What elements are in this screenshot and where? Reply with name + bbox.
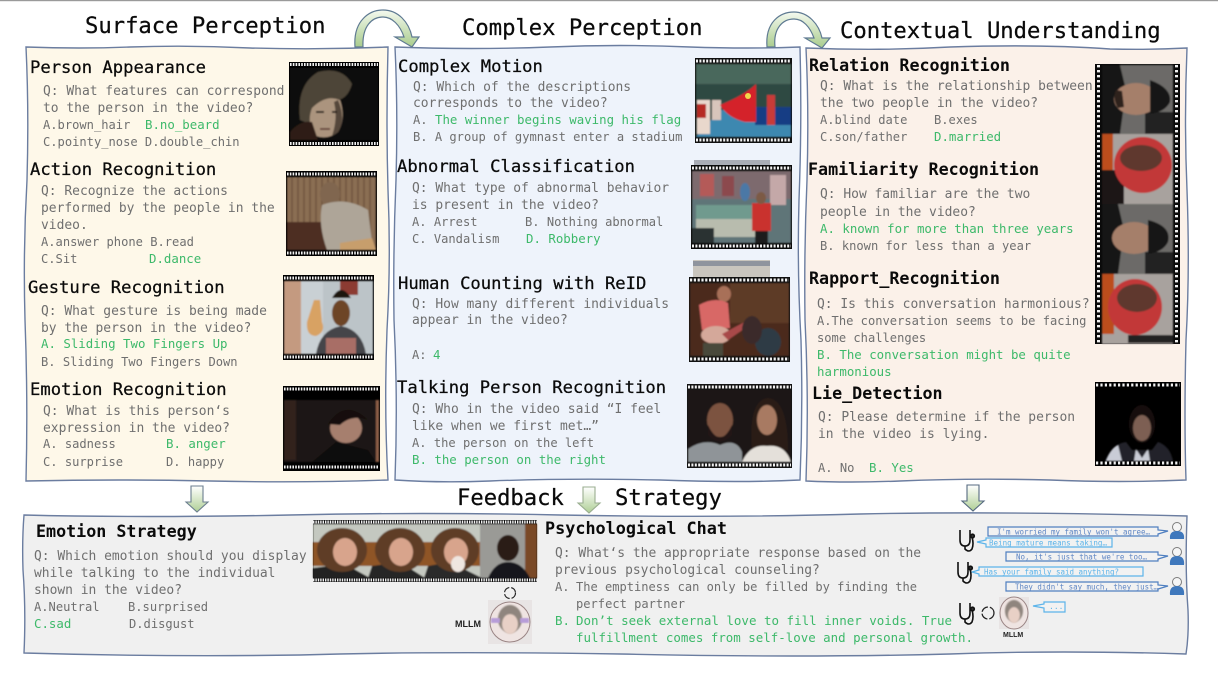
block: emotion strategy: Emotion Strategy — [36, 521, 197, 541]
image: gesture recognition film frame — [283, 275, 374, 360]
image: abnormal classification film frame — [691, 160, 792, 249]
image: human counting film frame — [689, 260, 790, 362]
image: lie detection film frame — [1095, 382, 1181, 466]
image: talking person film frame — [687, 384, 792, 468]
block: familiarity recognition: Familiarity Recognition — [808, 159, 1039, 179]
block: lie detection: B. Yes — [869, 460, 914, 475]
block: familiarity recognition: A. known for more than three years — [820, 221, 1074, 236]
block: human counting with reid: A: — [412, 348, 427, 362]
block: abnormal classification: C. Vandalism — [412, 232, 499, 246]
block: gesture recognition: Gesture Recognition — [28, 278, 225, 298]
arrow: down left — [186, 486, 208, 512]
block: emotion recognition: Q: What is this person‘s — [43, 404, 230, 419]
bubble: model reply: ... — [1049, 602, 1063, 611]
block: psychological chat: previous psychological counseling? — [555, 563, 820, 578]
block: action recognition: performed by the people in the — [41, 201, 275, 216]
block: lie detection: Q: Please determine if the person — [818, 410, 1075, 425]
block: action recognition: D.dance — [149, 251, 201, 266]
block: rapport recognition: Rapport_Recognition — [809, 268, 1000, 288]
panel: contextual understanding background — [805, 46, 1188, 482]
block: abnormal classification: D. Robbery — [526, 231, 601, 246]
block: emotion strategy: D.disgust — [129, 617, 195, 631]
block: relation recognition: the two people in the video? — [820, 96, 1038, 111]
block: relation recognition: A.blind date — [820, 113, 907, 127]
bubble: client line 3: They didn't say much, they just… — [1015, 582, 1158, 592]
block: complex motion: B. A group of gymnast enter a stadium — [413, 130, 682, 144]
block: relation recognition: D.married — [934, 129, 1001, 144]
block: emotion strategy: shown in the video? — [34, 583, 182, 598]
block: complex motion: Q: Which of the descriptions — [413, 80, 631, 95]
block: talking person recognition: B. the person on the right — [412, 452, 606, 467]
icon: stethoscope 1 — [960, 530, 974, 551]
block: emotion recognition: D. happy — [166, 455, 224, 469]
block: human counting with reid: 4 — [433, 347, 440, 362]
block: familiarity recognition: B. known for less than a year — [820, 239, 1031, 253]
block: person appearance: Person Appearance — [30, 58, 206, 78]
block: relation recognition: B.exes — [934, 113, 978, 127]
block: rapport recognition: B. The conversation might be quite — [817, 347, 1071, 362]
block: emotion strategy: B.surprised — [128, 600, 208, 614]
block: complex motion: The winner begins waving his flag — [435, 112, 681, 127]
chat: counseling conversation — [958, 522, 1184, 639]
image: emotion strategy film frame — [313, 520, 537, 582]
block: psychological chat: The emptiness can only be filled by finding the — [576, 580, 917, 594]
top edge line — [0, 0, 1218, 1]
block: emotion strategy: C.sad — [34, 616, 71, 631]
block: familiarity recognition: people in the video? — [820, 205, 976, 220]
image: emotion recognition film frame — [283, 386, 380, 471]
block: lie detection — [812, 383, 1075, 475]
block: action recognition — [30, 160, 275, 266]
icon: client 3 — [1170, 578, 1184, 595]
icon: loop left — [504, 588, 516, 598]
block: lie detection: in the video is lying. — [818, 427, 989, 442]
block: person appearance: C.pointy_nose D.double_chin — [43, 135, 240, 149]
image: action recognition film frame — [286, 171, 377, 256]
block: relation recognition: Q: What is the relationship between — [820, 79, 1093, 94]
block: complex motion: corresponds to the video? — [413, 96, 608, 111]
icon: MLLM avatar right — [999, 597, 1029, 629]
block: emotion recognition: B. anger — [166, 436, 226, 451]
image: person appearance film frame — [289, 62, 379, 146]
block: lie detection: A. No — [818, 461, 854, 475]
block: person appearance: Q: What features can correspond — [43, 84, 284, 99]
block: psychological chat: B. — [555, 613, 570, 628]
block: complex motion: Complex Motion — [398, 57, 543, 77]
block: talking person recognition: Talking Person Recognition — [397, 378, 666, 398]
icon: stethoscope 2 — [958, 562, 972, 583]
block: psychological chat: A. — [555, 580, 570, 594]
block: human counting with reid: appear in the video? — [412, 313, 568, 328]
block: emotion recognition: A. sadness — [43, 437, 116, 451]
block: psychological chat: fulfillment comes from self-love and personal growth. — [576, 630, 973, 645]
block: human counting with reid: Human Counting with ReID — [398, 274, 646, 294]
block: psychological chat: Psychological Chat — [545, 518, 727, 538]
image: complex motion film frame — [695, 58, 792, 143]
block: rapport recognition: harmonious — [817, 364, 892, 379]
bubble: client line 1: I'm worried my family won't agree… — [997, 528, 1150, 536]
icon: loop right — [982, 607, 994, 619]
arrow: surface to complex — [355, 10, 419, 47]
block: human counting with reid: Q: How many different individuals — [412, 297, 669, 312]
block: emotion recognition: Emotion Recognition — [30, 380, 227, 400]
heading: Strategy: Strategy — [615, 485, 722, 511]
icon: stethoscope 3 — [960, 603, 974, 624]
block: abnormal classification: is present in the video? — [412, 198, 599, 213]
block: psychological chat: Q: What‘s the appropriate response based on the — [555, 546, 921, 561]
bubble: model reply — [1033, 602, 1065, 612]
block: emotion recognition: C. surprise — [43, 455, 123, 469]
block: person appearance — [30, 58, 284, 149]
arrow: down right — [962, 485, 984, 511]
block: emotion strategy — [34, 521, 307, 631]
block: human counting with reid — [398, 274, 669, 362]
block: familiarity recognition: Q: How familiar are the two — [820, 187, 1030, 202]
heading: Feedback: Feedback — [457, 485, 565, 511]
block: person appearance: B.no_beard — [145, 117, 220, 132]
block: talking person recognition: Q: Who in the video said “I feel — [412, 402, 661, 417]
block: action recognition: A.answer phone B.read — [41, 235, 194, 249]
block: familiarity recognition — [808, 159, 1074, 253]
block: abnormal classification: A. Arrest — [412, 215, 478, 229]
block: action recognition: video. — [41, 218, 88, 233]
block: abnormal classification — [397, 157, 669, 246]
block: emotion recognition — [30, 380, 230, 469]
block: talking person recognition: like when we first met…” — [412, 419, 599, 434]
block: emotion strategy: A.Neutral — [34, 600, 100, 614]
panel: feedback strategy background — [23, 513, 1188, 656]
bubble: counselor line 1: Being mature means taking… — [989, 538, 1107, 548]
block: emotion strategy: Q: Which emotion should you display — [34, 549, 307, 564]
arrow: down centre — [578, 487, 600, 513]
image: vertical film strip of rotated faces — [1095, 64, 1180, 344]
block: relation recognition: Relation Recognition — [809, 55, 1010, 75]
block: action recognition: Q: Recognize the actions — [41, 184, 228, 199]
block: relation recognition: C.son/father — [820, 130, 907, 144]
label: MLLM right: MLLM — [1003, 632, 1023, 639]
block: talking person recognition — [397, 378, 666, 467]
block: psychological chat: Don’t seek external love to fill inner voids. True — [576, 613, 952, 628]
arrow: complex to contextual — [767, 12, 830, 48]
label: MLLM left: MLLM — [455, 619, 481, 629]
block: abnormal classification: Abnormal Classification — [397, 157, 635, 177]
block: complex motion — [398, 57, 682, 144]
bubble: counselor line 2: Has your family said anything? — [984, 568, 1119, 576]
bubble: client line 2: No, it's just that we're too… — [1016, 552, 1147, 562]
block: talking person recognition: A. the person on the left — [412, 436, 594, 450]
icon: client 2 — [1170, 548, 1184, 565]
block: rapport recognition: A.The conversation seems to be facing — [817, 314, 1086, 328]
block: lie detection: Lie_Detection — [812, 383, 943, 403]
block: complex motion: A. — [413, 113, 428, 127]
block: gesture recognition: Q: What gesture is being made — [41, 304, 267, 319]
block: person appearance: A.brown_hair — [43, 118, 130, 132]
block: psychological chat: perfect partner — [576, 597, 685, 611]
block: psychological chat — [545, 518, 973, 645]
block: action recognition: C.Sit — [41, 252, 77, 266]
icon: MLLM avatar left — [488, 600, 532, 644]
block: gesture recognition — [28, 278, 267, 369]
block: emotion strategy: while talking to the individual — [34, 566, 275, 581]
heading: Contextual Understanding: Contextual Understanding — [840, 18, 1161, 44]
block: gesture recognition: B. Sliding Two Fingers Down — [41, 355, 238, 369]
block: gesture recognition: by the person in the video? — [41, 321, 251, 336]
block: emotion recognition: expression in the video? — [43, 421, 230, 436]
block: rapport recognition — [809, 268, 1090, 379]
block: action recognition: Action Recognition — [30, 160, 216, 180]
panel: surface perception background — [24, 46, 389, 482]
block: gesture recognition: A. Sliding Two Fingers Up — [41, 336, 228, 351]
block: rapport recognition: some challenges — [817, 331, 926, 345]
block: rapport recognition: Q: Is this conversation harmonious? — [817, 297, 1090, 312]
block: relation recognition — [809, 55, 1093, 144]
heading: Surface Perception: Surface Perception — [85, 13, 325, 39]
heading: Complex Perception: Complex Perception — [462, 15, 702, 41]
block: abnormal classification: B. Nothing abnormal — [525, 215, 663, 229]
panel: complex perception background — [394, 46, 802, 482]
block: abnormal classification: Q: What type of abnormal behavior — [412, 181, 669, 196]
icon: client 1 — [1170, 522, 1184, 539]
block: person appearance: to the person in the video? — [43, 101, 253, 116]
